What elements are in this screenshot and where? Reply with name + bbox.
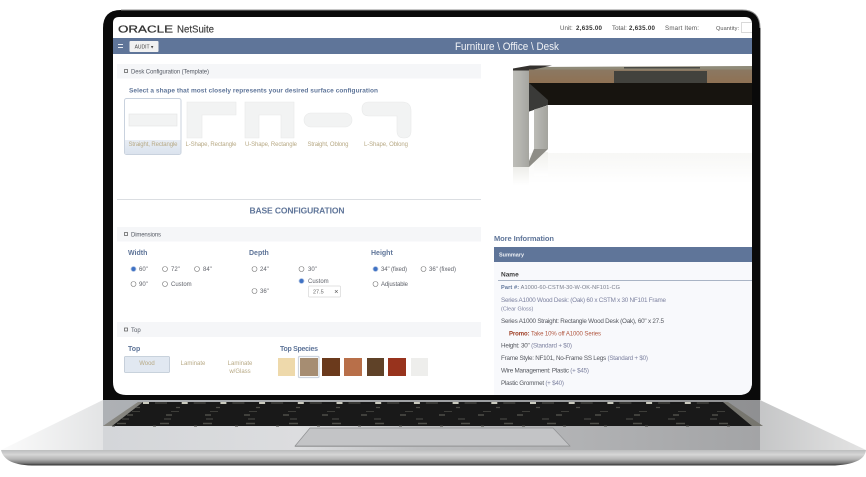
audit button (130, 41, 158, 52)
panel: top (117, 322, 481, 378)
summary row: series description: Series A1000 Wood Desk: (Oak) 60 x CSTM x 30 NF101 Frame (501, 297, 666, 304)
logo: Oracle NetSuite (118, 24, 214, 36)
heading: base configuration: BASE CONFIGURATION (250, 206, 344, 216)
menu icon (118, 44, 123, 48)
depth options: 30" (308, 267, 317, 273)
height options: Adjustable (381, 282, 409, 288)
option: U-shape rectangle: U-Shape, Rectangle (245, 142, 298, 148)
option: straight oblong (304, 113, 352, 148)
width options: 60" (139, 267, 148, 273)
audit button: AUDIT ▾ (135, 44, 154, 50)
option: L-shape oblong: L-Shape, Oblong (364, 142, 408, 148)
top species swatches (278, 346, 428, 378)
option: straight rectangle: Straight, Rectangle (128, 142, 178, 148)
option: U-shape rectangle (245, 102, 298, 148)
width options: Width (128, 250, 147, 257)
laptop lid bezel (103, 10, 760, 400)
material: laminate with glass (228, 361, 253, 375)
rear leg (534, 106, 548, 149)
left wedge (1, 400, 103, 450)
summary row: plastic grommet: Plastic Grommet (+ $40) (501, 380, 564, 387)
laptop base (1, 400, 866, 466)
summary row: promo: Promo: Take 10% off A1000 Series (509, 332, 601, 338)
logo: Oracle NetSuite: ORACLE (118, 24, 173, 36)
price summary: Quantity: (716, 26, 739, 32)
desk top surface (529, 66, 752, 70)
width options: Custom (171, 282, 192, 288)
depth options: 27.5 (313, 290, 324, 296)
material: wood: Wood (139, 361, 155, 367)
keyboard well shading (103, 400, 760, 426)
depth options: 24" (260, 267, 269, 273)
panel: dimensions (117, 227, 481, 297)
keyboard (112, 402, 752, 426)
summary row: wire management: Wire Management: Plastic (+ $45) (501, 368, 589, 374)
material: laminate with glass: w/Glass (228, 369, 251, 375)
width options: 72" (171, 267, 180, 273)
summary row: series description (501, 297, 666, 312)
height options (371, 250, 456, 288)
keyboard deck (103, 400, 760, 450)
price summary: Smart Item: (665, 25, 699, 32)
option: L-shape oblong (362, 102, 411, 148)
price summary: Unit: (560, 25, 573, 32)
material: laminate with glass: Laminate (228, 361, 253, 367)
price summary (560, 22, 752, 32)
price summary: Total: (612, 25, 627, 32)
trackpad (295, 428, 570, 446)
screen (113, 17, 752, 395)
front leg (513, 70, 529, 167)
heading: more information: More Information (494, 234, 554, 243)
right wedge (760, 400, 866, 450)
width options: 90" (139, 282, 148, 288)
depth options: Depth (249, 250, 269, 257)
option: straight oblong: Straight, Oblong (308, 142, 348, 148)
width options (128, 250, 212, 288)
base front edge (1, 450, 866, 466)
floor reflection (525, 153, 752, 183)
panel: summary: Name (501, 272, 519, 278)
height options: 36" (fixed) (429, 267, 456, 273)
option: L-shape rectangle (186, 102, 237, 148)
logo: Oracle NetSuite: NetSuite (177, 24, 214, 36)
summary row: frame style: Frame Style: NF101, No-Frame SS Legs (Standard + $0) (501, 355, 648, 362)
summary row: part number: Part #: A1000-60-CSTM-30-W-OK-NF101-CG (501, 285, 620, 291)
top species swatches: Top Species (280, 346, 318, 353)
black body (529, 83, 752, 112)
option: straight rectangle (124, 98, 181, 154)
panel: dimensions: Dimensions (131, 232, 161, 238)
dark inset panel (614, 71, 707, 83)
panel: desk configuration: Desk Configuration (Template) (131, 70, 209, 76)
page title: Furniture \ Office \ Desk (455, 41, 559, 53)
summary row: series description: (Clear Gloss) (501, 306, 534, 312)
depth options: Custom (308, 279, 329, 285)
panel: summary: Summary (499, 252, 525, 258)
depth options: 36" (260, 289, 269, 295)
depth options (249, 250, 340, 297)
price summary: 2,635.00 (576, 25, 603, 32)
summary row: height: Height: 30" (Standard + $0) (501, 342, 572, 350)
height options: Height (371, 250, 393, 257)
summary row: straight rectangle: Series A1000 Straight: Rectangle Wood Desk (Oak), 60" x 27.5 (501, 318, 664, 325)
height options: 34" (fixed) (381, 267, 407, 273)
leg foot (529, 149, 548, 167)
option: L-shape rectangle: L-Shape, Rectangle (186, 142, 237, 148)
panel: top: Top (128, 346, 140, 353)
wood apron (529, 70, 752, 83)
instruction heading: Select a shape that most closely represents your desired surface configuration (129, 88, 378, 94)
desk photo (513, 66, 752, 185)
width options: 84" (203, 267, 212, 273)
depth options: ✕ (334, 290, 339, 296)
material: wood (124, 356, 170, 372)
price summary: 2,635.00 (629, 25, 656, 32)
material: laminate: Laminate (181, 361, 206, 367)
panel: top: Top (131, 328, 141, 334)
panel: summary (494, 247, 752, 395)
navigation bar (113, 38, 752, 54)
panel: desk configuration (117, 64, 481, 154)
